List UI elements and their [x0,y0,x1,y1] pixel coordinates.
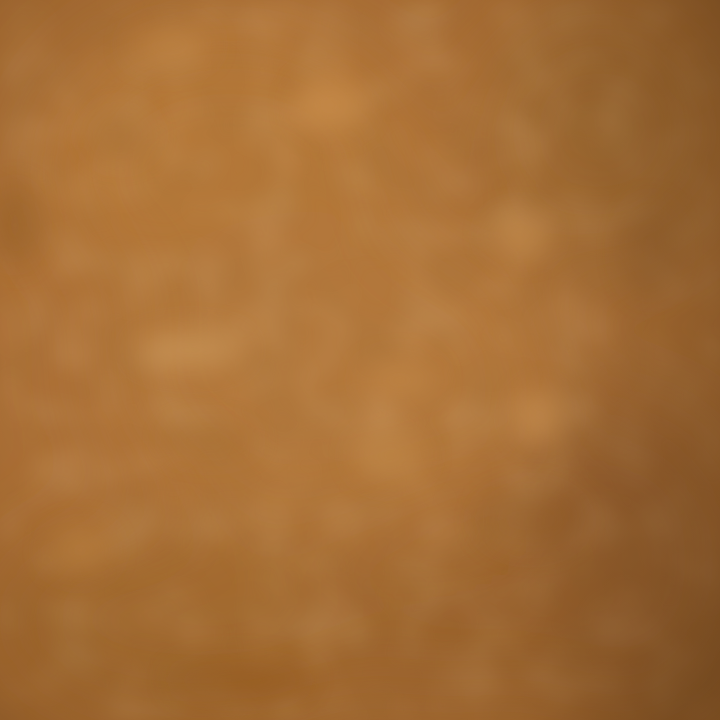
mottled highlights [50,27,562,572]
mottled shadows [0,111,676,698]
